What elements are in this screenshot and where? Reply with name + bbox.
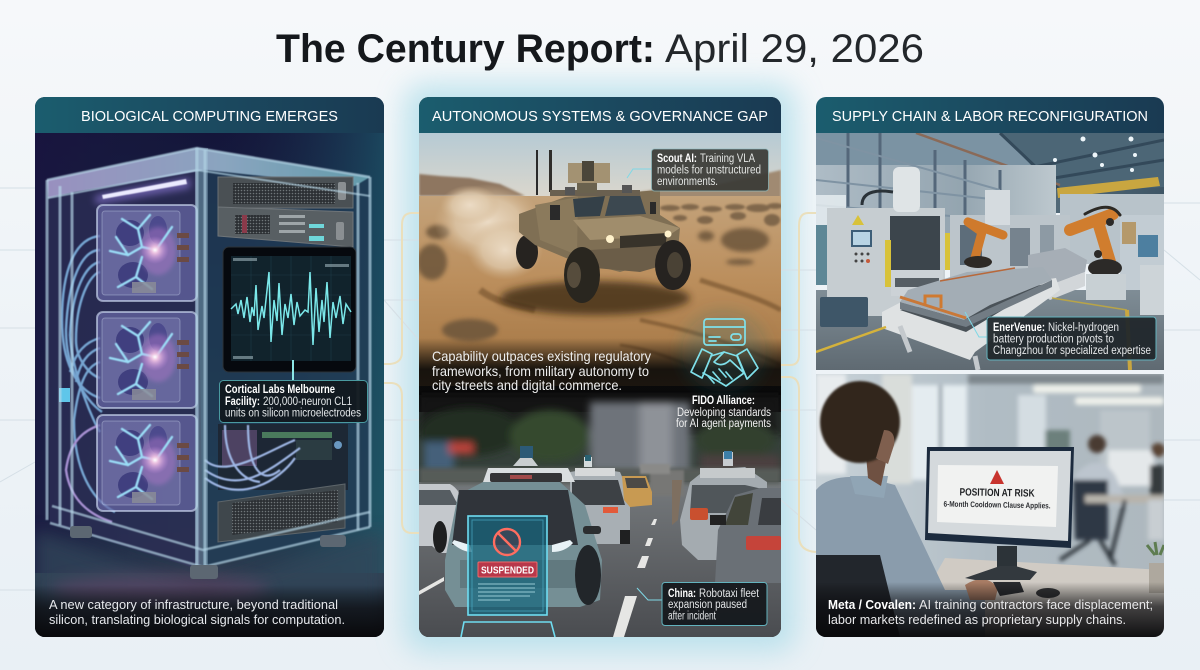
plant (1147, 542, 1164, 593)
callout: FIDO Alliance: Developing standards (677, 407, 771, 419)
text: infrastructure caption (49, 597, 345, 627)
dark text band (419, 340, 781, 410)
callout: Scout AI: models for unstructured (657, 164, 761, 176)
panel: biological computing (35, 97, 384, 637)
cables (62, 236, 115, 522)
callout: EnerVenue: Nickel-hydrogen (1048, 322, 1119, 334)
text: Meta / Covalen caption: Meta / Covalen: (828, 597, 916, 612)
callout: FIDO Alliance: for AI agent payments (676, 418, 771, 430)
text: capability statement: frameworks, from military autonomy to (432, 363, 649, 379)
scene: battery factory (816, 133, 1164, 370)
title (276, 27, 924, 71)
panel: autonomous systems (417, 97, 783, 637)
distant scrub (660, 203, 783, 226)
text: infrastructure caption: A new category of infrastructure, beyond traditional (49, 597, 338, 612)
text: capability statement: city streets and digital commerce. (432, 377, 622, 393)
tracks (478, 277, 781, 364)
connector: left panel to centre panel, upper (384, 213, 419, 364)
floor markings (816, 327, 886, 352)
monitor with warning: POSITION AT RISK (959, 486, 1035, 500)
text: capability statement: Capability outpaces existing regulatory (432, 348, 651, 364)
vehicle (516, 150, 691, 303)
panel: supply chain and labor (816, 97, 1165, 637)
header: supply chain: SUPPLY CHAIN & LABOR RECONFIGURATION (832, 108, 1148, 125)
header: supply chain (816, 97, 1164, 133)
right robotaxi (672, 451, 767, 560)
lane markings (419, 519, 657, 637)
dust cloud (438, 186, 531, 254)
hologram: suspended notice (461, 516, 555, 637)
rack feet (70, 526, 346, 579)
text: Meta / Covalen caption: labor markets redefined as proprietary supply chains. (828, 612, 1126, 627)
title: The Century Report: (276, 27, 655, 71)
hologram: suspended notice: SUSPENDED (481, 564, 534, 576)
callout: EnerVenue: Changzhou for specialized expertise (993, 345, 1151, 357)
glass posts and edges (47, 148, 370, 567)
text: infrastructure caption: silicon, translating biological signals for computation. (49, 612, 345, 627)
callout: EnerVenue: battery production pivots to (993, 334, 1114, 346)
text: Meta / Covalen caption (828, 597, 1153, 627)
callout: Scout AI: Scout AI: (657, 153, 697, 165)
callout: FIDO Alliance (676, 395, 771, 430)
glow behind centre panel (404, 84, 796, 652)
main robotaxi (445, 446, 602, 607)
monitor with waveform (223, 247, 356, 380)
callout: Cortical Labs: Cortical Labs Melbourne (225, 384, 335, 396)
text: capability statement (432, 348, 651, 393)
callout: FIDO Alliance: FIDO Alliance: (692, 395, 755, 407)
callout: Cortical Labs: units on silicon microelectrodes (225, 408, 361, 420)
callout: China robotaxi (637, 582, 767, 626)
server units (218, 177, 353, 247)
divider strip (816, 370, 1164, 374)
rack back (150, 178, 370, 565)
callout: EnerVenue (965, 312, 1156, 360)
connector: left panel to centre panel, lower (384, 383, 419, 533)
text: Meta / Covalen caption: AI training contractors face displacement; (919, 597, 1153, 612)
monitor with warning: 6-Month Cooldown Clause Applies. (943, 500, 1051, 510)
connector: centre panel to right panel, lower (781, 377, 816, 552)
scene: desert vehicle (417, 133, 783, 637)
callout: Scout AI: environments. (657, 176, 718, 188)
callout: Cortical Labs: 200,000-neuron CL1 (263, 396, 352, 408)
keyboard and mouse (993, 582, 1060, 598)
scene: office worker at monitor (816, 374, 1165, 637)
callout: Scout AI (627, 149, 768, 191)
callout: Cortical Labs: Facility: (225, 396, 260, 408)
rack top (47, 148, 370, 198)
callout: China robotaxi: after incident (668, 610, 717, 622)
main machine (820, 167, 950, 327)
vehicle shadow (500, 281, 690, 315)
header: biological computing (35, 97, 384, 133)
floor (35, 530, 381, 608)
desk (900, 558, 1164, 637)
lower server (218, 484, 345, 542)
scene: city street (419, 412, 781, 637)
callout: China robotaxi: expansion paused (668, 599, 747, 611)
header: autonomous systems (419, 97, 781, 133)
background coworkers (1060, 435, 1165, 565)
monitor stand (965, 546, 1037, 580)
callout: China robotaxi: China: (668, 588, 696, 600)
callout: China robotaxi: Robotaxi fleet (699, 588, 760, 600)
callout: Scout AI: Training VLA (700, 153, 755, 165)
callout: EnerVenue: EnerVenue: (993, 322, 1045, 334)
robot arms (964, 207, 1126, 300)
header: autonomous systems: AUTONOMOUS SYSTEMS & GOVERNANCE GAP (432, 108, 768, 125)
bottom fade (35, 585, 384, 637)
light bar (95, 178, 190, 204)
header: biological computing: BIOLOGICAL COMPUTING EMERGES (81, 108, 338, 125)
far right car (710, 488, 781, 583)
scrub bushes (417, 225, 769, 341)
title: April 29, 2026 (665, 27, 924, 71)
panel image: glass rack (35, 133, 384, 637)
far machines (816, 190, 1164, 315)
battery modules and conveyor (882, 248, 1087, 370)
connector: centre panel to right panel, upper (781, 213, 816, 365)
bottom electronics and wiring (205, 424, 348, 490)
second robotaxi (570, 455, 630, 544)
yellow taxi (622, 464, 684, 507)
callout: Cortical Labs (220, 380, 368, 422)
left car (419, 484, 459, 553)
neuron modules (97, 205, 197, 511)
worker (816, 381, 998, 637)
icon: card and handshake (682, 312, 766, 392)
monitor with warning (925, 447, 1074, 548)
